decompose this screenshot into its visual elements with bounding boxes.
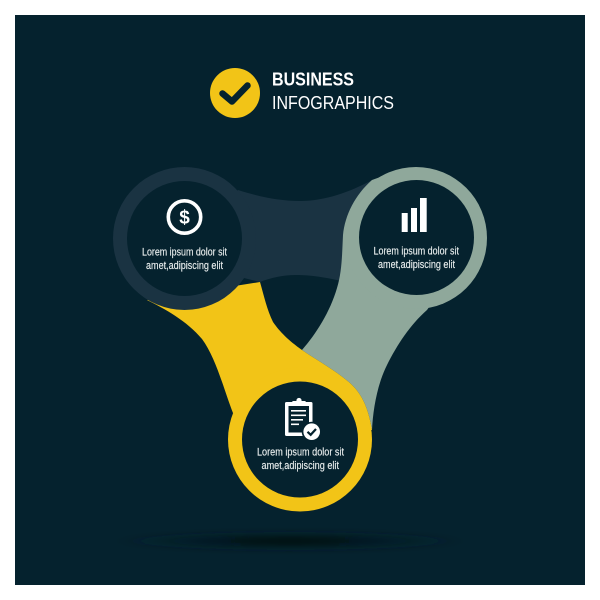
icon: clipboard xyxy=(285,398,322,442)
panel: chart xyxy=(359,180,474,295)
text block: amet,adipiscing elit xyxy=(146,260,223,272)
inner disc xyxy=(127,181,242,296)
panel: finance xyxy=(127,181,242,296)
panel: checklist xyxy=(242,382,358,498)
text block xyxy=(374,246,459,271)
header xyxy=(210,68,394,118)
dark arm xyxy=(170,180,390,290)
ground shadow xyxy=(120,531,460,551)
yellow ring xyxy=(228,368,372,512)
text block: Lorem ipsum dolor sit xyxy=(374,246,459,258)
icon: dollar: $ xyxy=(179,208,190,228)
text block: amet,adipiscing elit xyxy=(262,460,339,472)
green arm xyxy=(302,170,470,430)
inner disc xyxy=(242,382,358,498)
text block: amet,adipiscing elit xyxy=(378,259,455,271)
yellow arm xyxy=(147,282,372,430)
text block xyxy=(257,447,344,472)
title xyxy=(272,70,394,113)
green ring xyxy=(345,167,487,309)
icon: check badge xyxy=(210,68,260,118)
title: BUSINESS xyxy=(272,70,354,90)
title: INFOGRAPHICS xyxy=(272,93,394,113)
icon: bars xyxy=(402,198,427,232)
text block xyxy=(142,246,227,272)
text block: Lorem ipsum dolor sit xyxy=(257,447,344,459)
inner disc xyxy=(359,180,474,295)
text block: Lorem ipsum dolor sit xyxy=(142,246,227,258)
dark ring xyxy=(113,167,256,310)
